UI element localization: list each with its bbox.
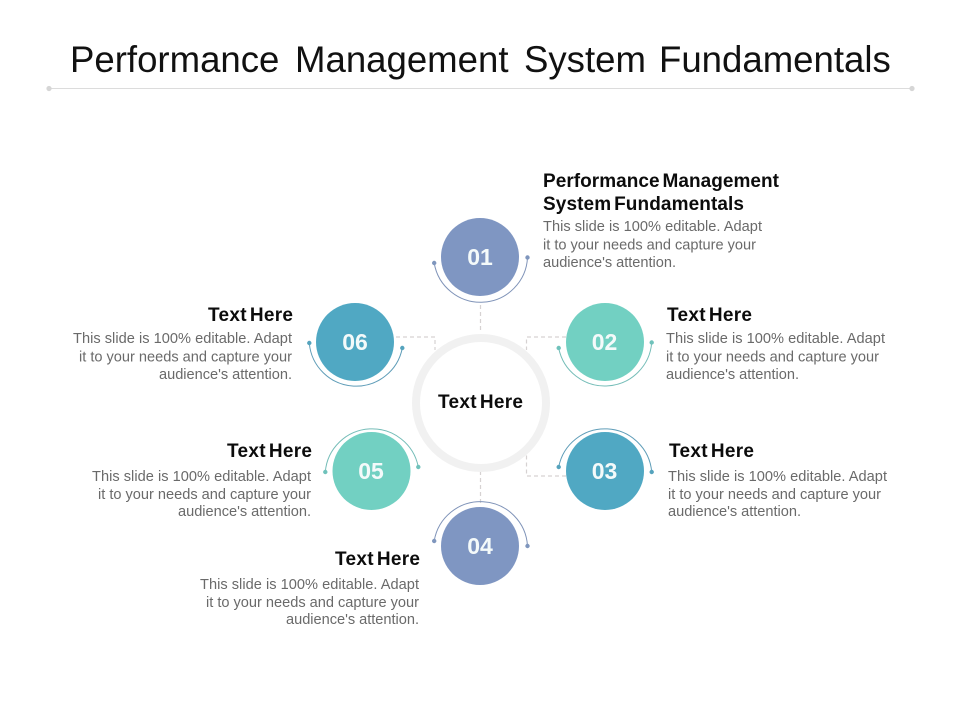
title: System (524, 39, 646, 80)
title: Performance (70, 39, 279, 80)
text block 05: it to your needs and capture your (98, 487, 311, 503)
text block 04: it to your needs and capture your (206, 595, 419, 611)
text block 05: Text Here (227, 441, 312, 462)
node 01: 01 (467, 244, 493, 270)
node 03 (556, 429, 654, 510)
text block 04: This slide is 100% editable. Adapt (200, 577, 419, 593)
text block 03: This slide is 100% editable. Adapt (668, 469, 887, 485)
text block 04: Text Here (335, 549, 420, 570)
node 02: 02 (592, 329, 617, 355)
text block 01: System Fundamentals (543, 194, 744, 215)
text block 06 (73, 305, 293, 383)
node 06: 06 (342, 329, 368, 355)
text block 05 (92, 441, 312, 520)
text block 06: Text Here (208, 305, 293, 326)
text block 06: audience's attention. (159, 367, 292, 383)
node 04: 04 (467, 533, 493, 559)
text block 02: This slide is 100% editable. Adapt (666, 331, 885, 347)
text block 04 (200, 549, 420, 628)
text block 02: audience's attention. (666, 367, 799, 383)
text block 06: This slide is 100% editable. Adapt (73, 331, 292, 347)
text block 05: audience's attention. (178, 504, 311, 520)
text block 01 (543, 171, 780, 271)
text block 03: it to your needs and capture your (668, 487, 881, 503)
text block 02: it to your needs and capture your (666, 350, 879, 366)
text block 04: audience's attention. (286, 612, 419, 628)
text block 01: This slide is 100% editable. Adapt (543, 219, 762, 235)
dashed connectors (396, 305, 566, 505)
node 01 (432, 218, 530, 302)
title: Fundamentals (659, 39, 891, 80)
title divider (46, 86, 915, 91)
text block 03: audience's attention. (668, 504, 801, 520)
text block 01: Performance Management (543, 171, 780, 192)
text block 05: This slide is 100% editable. Adapt (92, 469, 311, 485)
node 06 (307, 303, 404, 386)
text block 02: Text Here (667, 305, 752, 326)
text block 01: audience's attention. (543, 255, 676, 271)
text block 01: it to your needs and capture your (543, 238, 756, 254)
node 02 (556, 303, 654, 386)
node 05 (323, 429, 420, 510)
node 05: 05 (358, 458, 384, 484)
node 03: 03 (592, 458, 617, 484)
text block 02 (666, 305, 885, 383)
center ring (416, 338, 546, 468)
title: Management (295, 39, 509, 80)
node 04 (432, 502, 530, 585)
text block 03 (668, 441, 887, 520)
center label: Text Here (438, 392, 523, 413)
text block 06: it to your needs and capture your (79, 350, 292, 366)
text block 03: Text Here (669, 441, 754, 462)
